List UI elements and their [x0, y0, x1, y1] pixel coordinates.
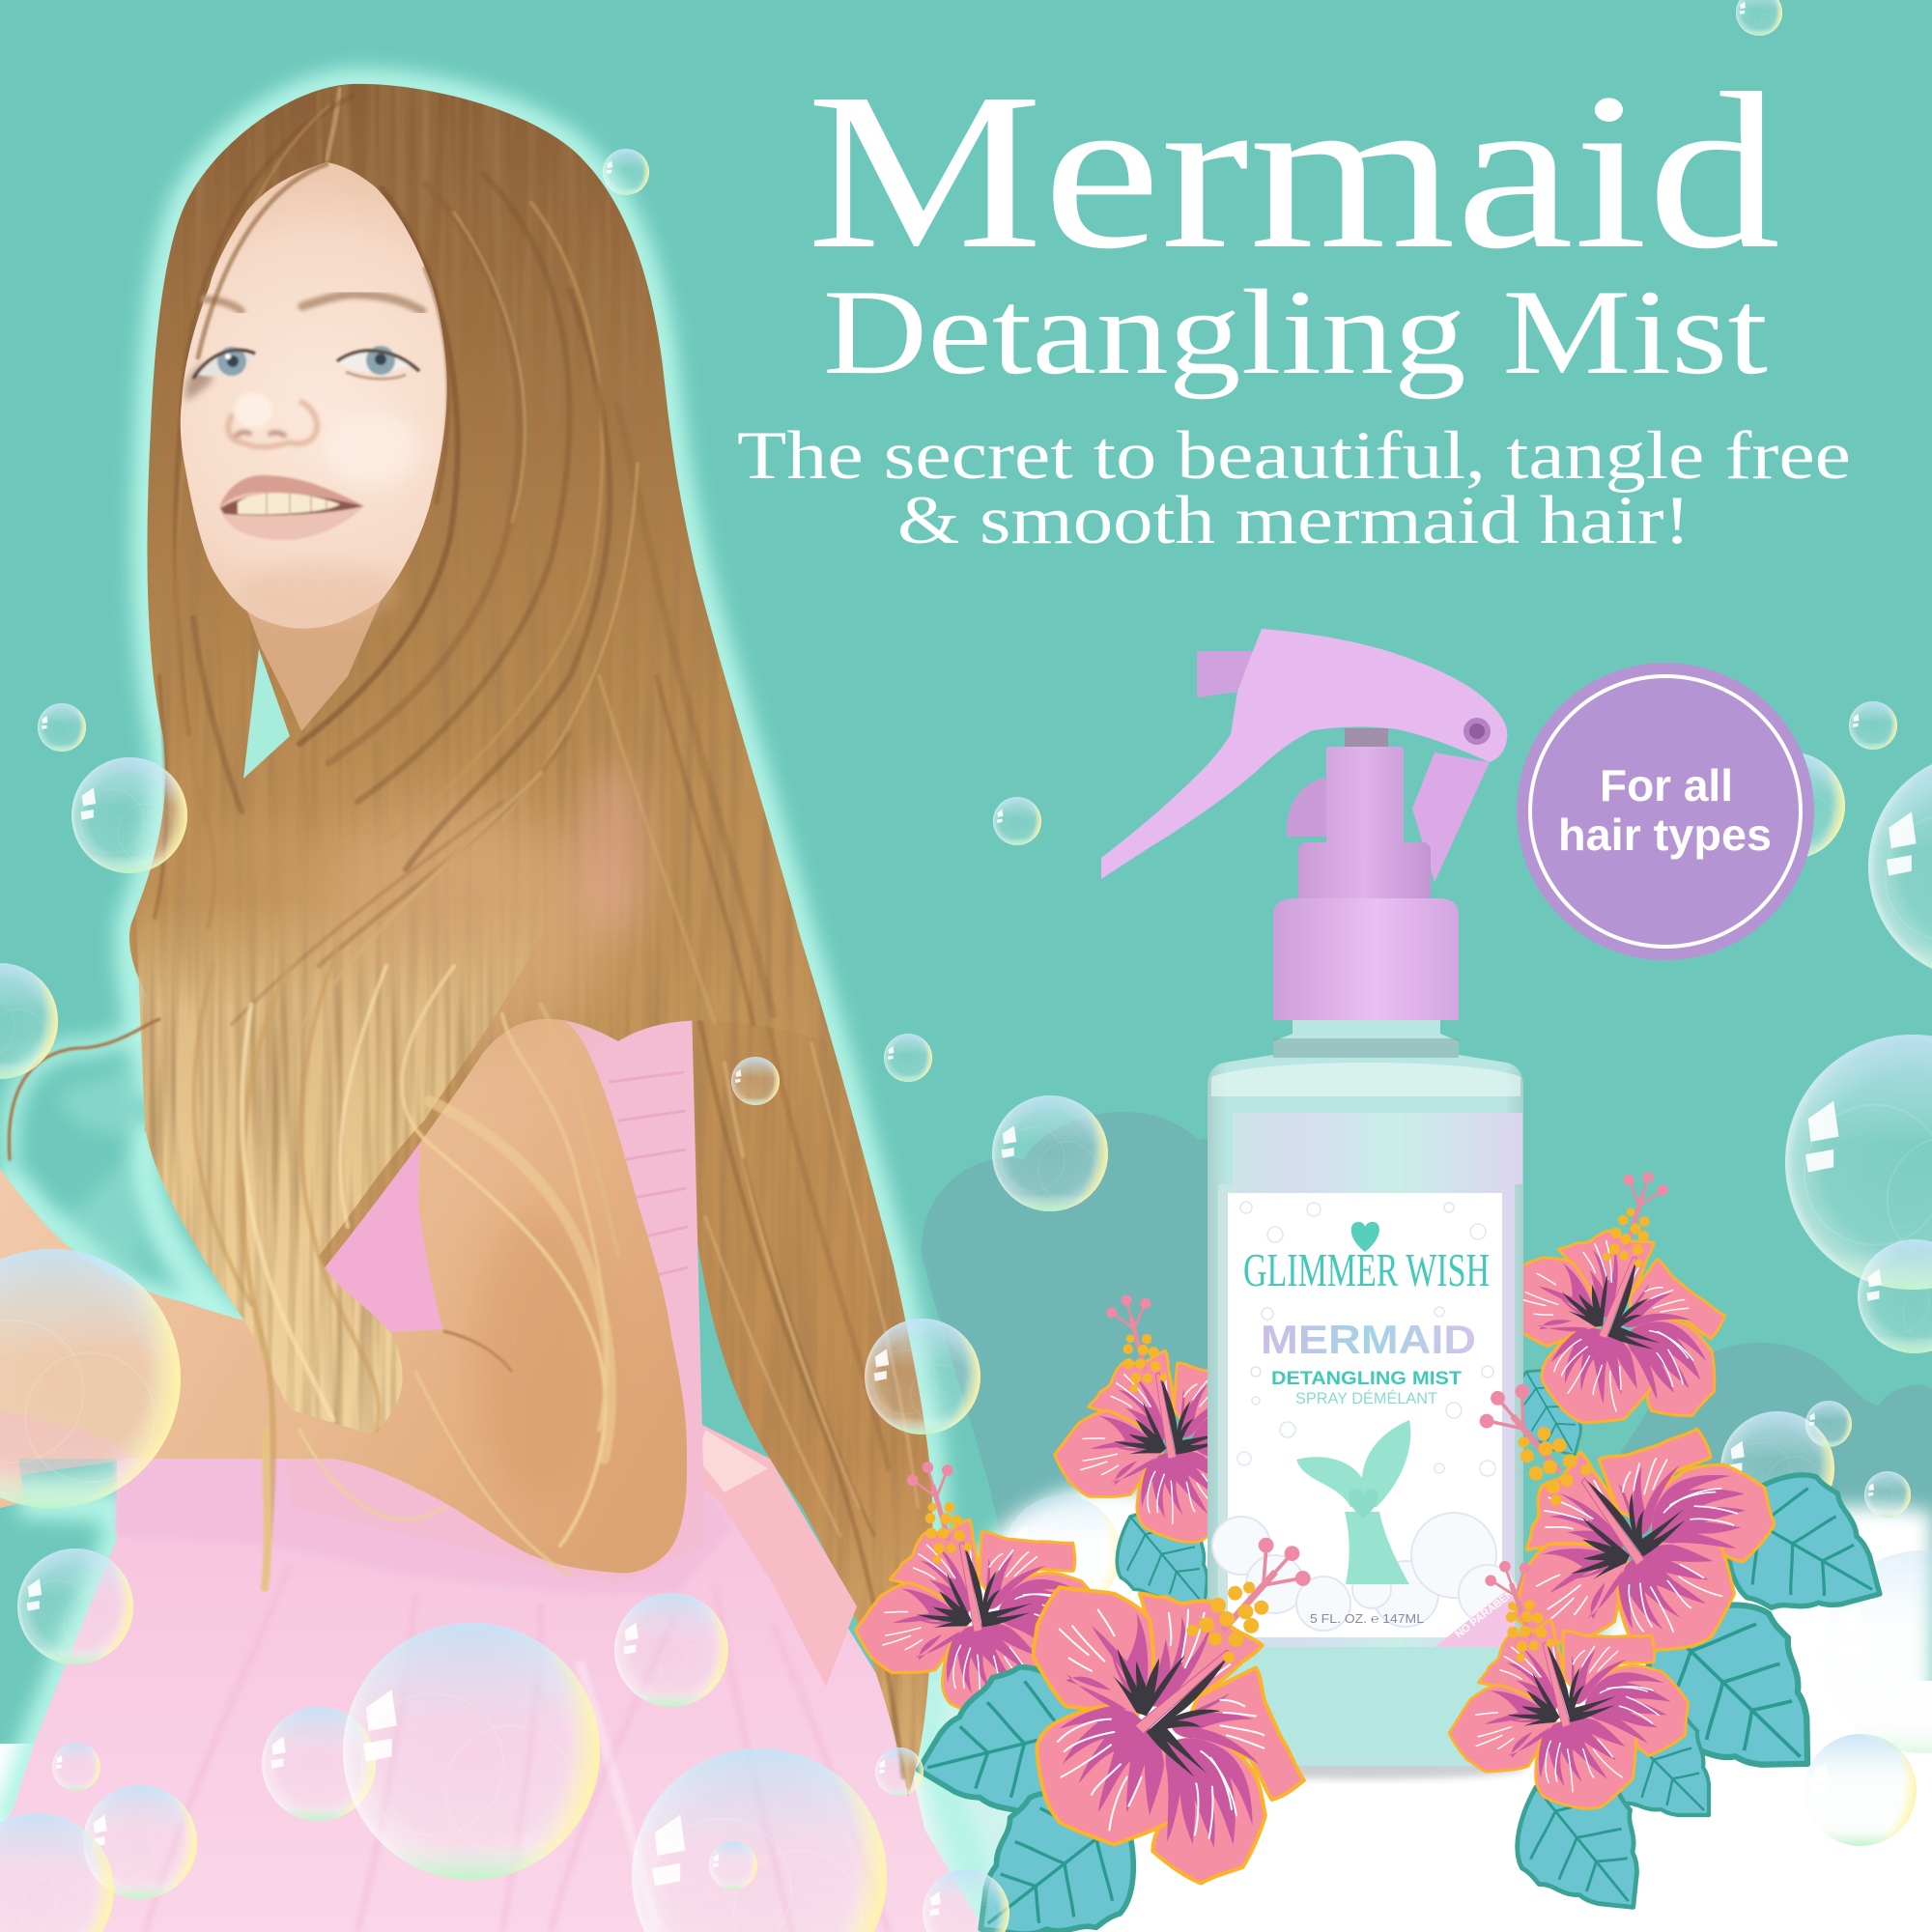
brand heart [1351, 1222, 1379, 1252]
badge: for all hair types: For all [1600, 760, 1733, 810]
glass neck [1208, 1020, 1523, 1766]
volume: 5 FL. OZ. ℮ 147ML [1310, 1611, 1424, 1626]
front hair over face edge [198, 164, 448, 502]
right leaves behind flowers [1488, 1447, 1915, 1932]
face [181, 162, 447, 629]
back bubbles behind the flowers [1005, 1401, 1932, 1846]
white foam ground [0, 1488, 1932, 1932]
french subtitle: SPRAY DÉMÉLANT [1295, 1389, 1437, 1407]
tagline [737, 418, 1851, 558]
back hair right [676, 942, 933, 1797]
ribbon [691, 1422, 857, 1687]
nose [228, 393, 317, 447]
arm [0, 1015, 687, 1573]
skirt [0, 1454, 985, 1932]
product subtitle: DETANGLING MIST [1271, 1369, 1462, 1389]
gap by neck [243, 649, 290, 779]
bottle shadow [1207, 1756, 1525, 1779]
no paraben badge: NO PARABEN [1453, 1588, 1517, 1640]
eyebrows [205, 295, 422, 311]
badge: for all hair types [1517, 663, 1814, 960]
brand name: GLIMMER WISH [1243, 1243, 1490, 1296]
title: Mermaid [807, 47, 1780, 296]
lit shoulder under hair [174, 763, 650, 1053]
flowers behind bottle [1045, 1165, 1759, 1580]
leaves behind bottle [1094, 1352, 1608, 1635]
neck [246, 599, 382, 731]
cap [1273, 898, 1459, 1020]
clouds: darker teal [922, 1112, 1932, 1584]
girl glow outline [0, 84, 995, 1932]
mouth [219, 475, 364, 540]
tagline: The secret to beautiful, tangle free [737, 418, 1851, 494]
tagline: & smooth mermaid hair! [897, 483, 1690, 558]
label bubbles [1237, 1202, 1495, 1476]
eye right [337, 346, 419, 379]
left leaves [900, 1651, 1171, 1932]
label [1212, 1184, 1517, 1647]
main hair mass [129, 84, 829, 1275]
no paraben badge [1435, 1584, 1517, 1647]
dress bodice [265, 1005, 705, 1584]
spray trigger [1101, 629, 1507, 1020]
hair part line [327, 87, 340, 162]
back hair strands [696, 995, 918, 1777]
left hibiscus behind its leaves [846, 1456, 1140, 1757]
iridescent band [1233, 1113, 1522, 1184]
product name: MERMAID [1261, 1317, 1476, 1362]
girl photo illustration [0, 84, 985, 1932]
hair strands [9, 97, 773, 1588]
badge: for all hair types: hair types [1558, 810, 1772, 860]
eye left [193, 347, 255, 379]
front flowers [1034, 1373, 1783, 1884]
bottle base [1233, 1647, 1522, 1753]
subtitle: Detangling Mist [823, 266, 1768, 400]
spray bottle [1101, 629, 1525, 1779]
blond hair lengths [135, 898, 560, 1435]
mermaid tail [1296, 1420, 1410, 1584]
